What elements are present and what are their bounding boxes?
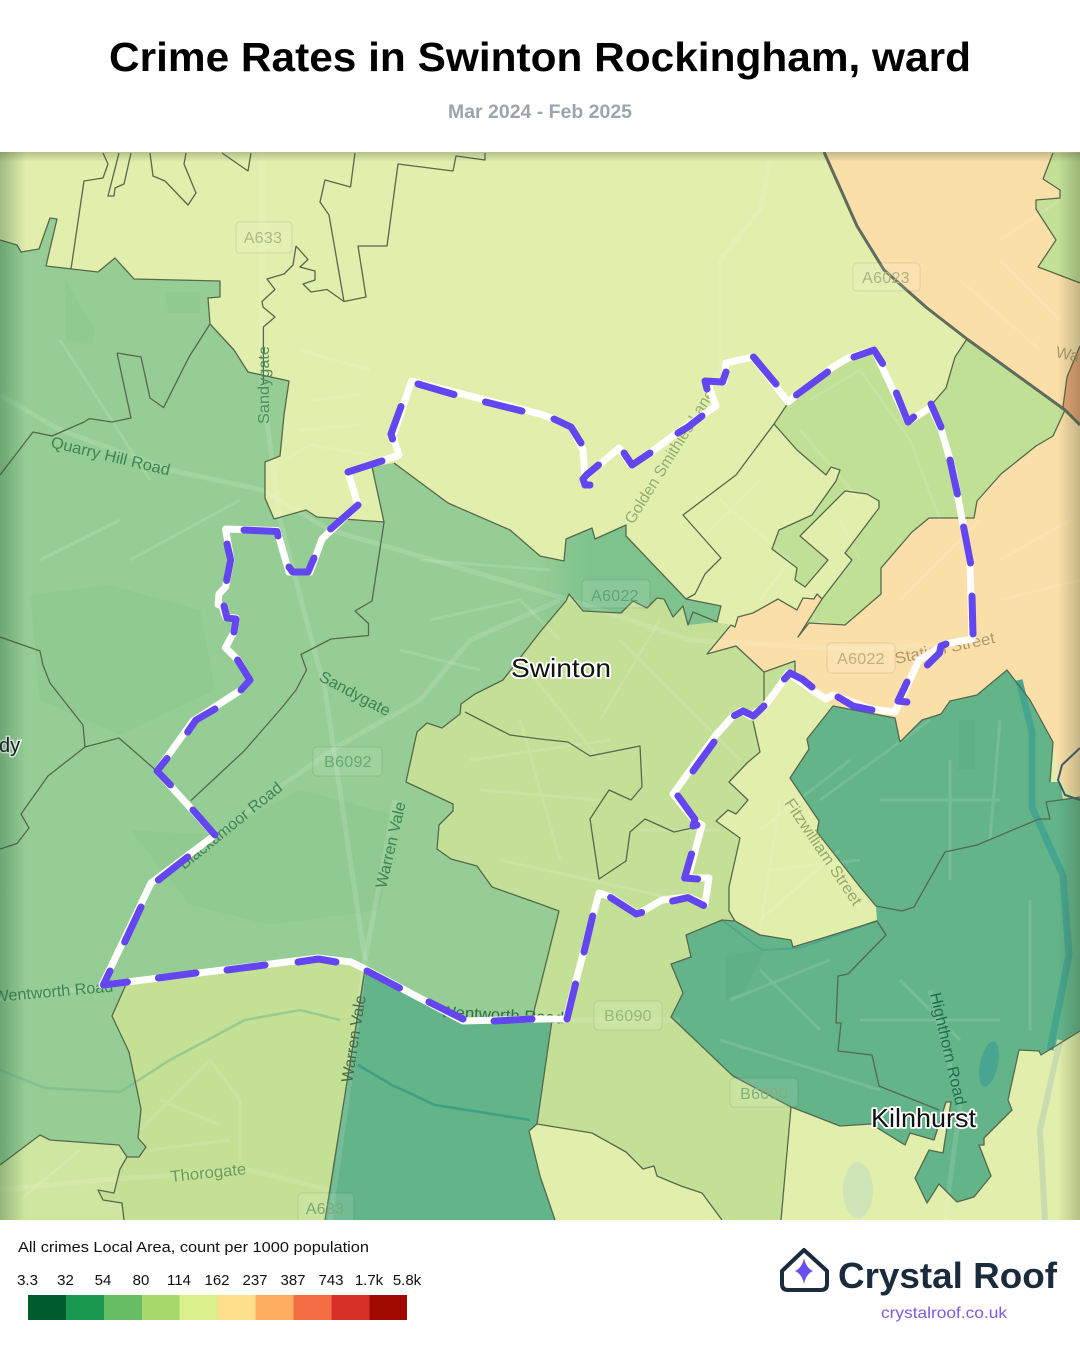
logo: Crystal Roof: [782, 1250, 1058, 1296]
road shield: A6022 west: [582, 580, 650, 608]
road labels: Warren Vale: [339, 994, 370, 1084]
legend: colour scale: [28, 1295, 407, 1320]
road shield: A6022 east: A6022: [837, 651, 885, 668]
legend: scale values: 162: [204, 1272, 230, 1289]
area boundary lines: [0, 152, 1080, 1220]
road shield: A6023: [853, 263, 920, 291]
area: dark orange sliver: [1063, 346, 1080, 425]
rail line: [1040, 1040, 1060, 1220]
road shield: A6022 east: [827, 643, 895, 673]
area: north-east light green: [772, 339, 1065, 637]
title: Crime Rates in Swinton Rockingham, ward: [109, 34, 971, 80]
road labels: Highthorn Road: [926, 991, 969, 1107]
area: A6022 darker green strip: [554, 526, 720, 625]
road labels: Station Street: [893, 630, 997, 668]
road labels: Warren Vale: [373, 800, 410, 890]
subtitle: date range: Mar 2024 - Feb 2025: [448, 102, 632, 123]
legend: scale values: 3.3: [17, 1272, 38, 1289]
legend: scale values: 237: [242, 1272, 268, 1289]
legend: title: All crimes Local Area, count per 1000 population: [18, 1239, 369, 1256]
area: darker patches in east green: [725, 720, 975, 1000]
panel: choropleth map: [0, 152, 1080, 1223]
road shield: A633 south: A633: [306, 1201, 344, 1218]
area: lower-left light green: [99, 962, 364, 1220]
legend: scale values: 1.7k: [355, 1272, 384, 1289]
area: south dark green: [325, 969, 555, 1220]
road labels: Sandygate: [316, 669, 393, 720]
road shield: B6092: B6092: [324, 754, 372, 771]
road labels: Wa: [1054, 344, 1080, 366]
area: east orange: [707, 410, 1080, 800]
road shield: A633 north: [236, 222, 292, 253]
road labels: Fitzwilliam Street: [781, 796, 865, 909]
water: river and lake: [0, 680, 1080, 1218]
area: west mid green: [0, 218, 600, 1165]
legend: scale values: 387: [280, 1272, 306, 1289]
ward boundary: white base line: [102, 350, 972, 1021]
area: south-west pale green: [0, 1135, 127, 1220]
road shield: B6090 west: [594, 1001, 662, 1030]
area: darker patches in west green: [30, 280, 395, 925]
road network: [0, 152, 1080, 1220]
road labels: [0, 344, 1080, 1186]
road shield: B6090 east: [730, 1078, 798, 1107]
icon: house with star: [782, 1250, 827, 1290]
road labels: Wentworth Road: [440, 1004, 565, 1027]
legend: scale values: 32: [57, 1272, 74, 1289]
road labels: Quarry Hill Road: [49, 434, 172, 479]
legend: scale values: 5.8k: [393, 1272, 422, 1289]
ward boundary: purple dashes: [103, 350, 973, 1021]
legend: scale values: 54: [95, 1272, 111, 1289]
area: Kilnhurst dark green: [671, 670, 1080, 1203]
road shield: A633 south: [298, 1193, 354, 1223]
road shield: B6092: [313, 747, 382, 776]
legend: scale values: 743: [318, 1272, 344, 1289]
map edge shading: [0, 152, 1080, 1220]
road labels: Thorogate: [170, 1161, 247, 1186]
road shield: A6022 west: A6022: [591, 588, 639, 605]
road labels: Golden Smithies Lane: [622, 387, 719, 527]
road shield: B6090 east: B6090: [740, 1086, 788, 1103]
place label: Swinton: Swinton: [511, 653, 611, 683]
road labels: Sandygate: [256, 346, 273, 424]
place label: Kilnhurst: Kilnhurst: [871, 1103, 977, 1133]
area: north-east orange: [824, 152, 1080, 425]
road shield: A6023: A6023: [862, 270, 910, 287]
legend: scale values: 114: [167, 1272, 191, 1289]
road shield: B6090 west: B6090: [604, 1008, 652, 1025]
road labels: Blackamoor Road: [176, 779, 286, 873]
road shield: A633 north: A633: [244, 230, 282, 247]
area: top-right green: [1036, 153, 1080, 283]
logo wordmark: Crystal Roof: [838, 1255, 1058, 1296]
legend: scale values: 80: [133, 1272, 149, 1289]
website link: crystalroof.co.uk: [881, 1305, 1008, 1322]
legend: scale values: [17, 1272, 422, 1289]
area: central Swinton light green: [406, 594, 795, 1220]
